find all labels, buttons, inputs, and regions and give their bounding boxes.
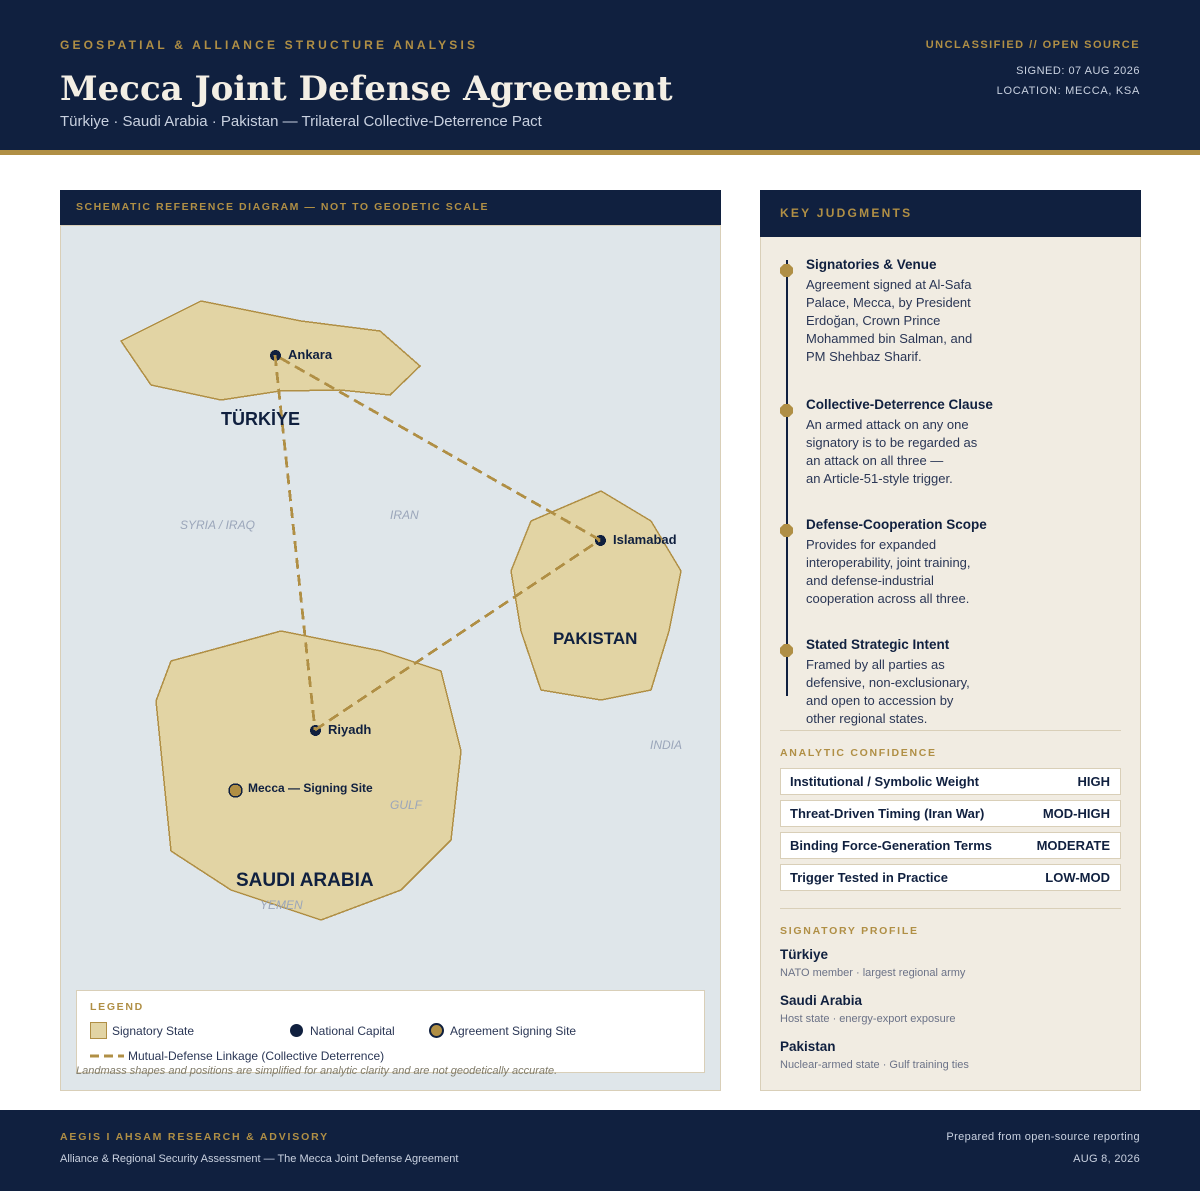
location: LOCATION: MECCA, KSA [997,85,1140,97]
confidence heading: ANALYTIC CONFIDENCE [780,747,937,759]
region: Pakistan [511,491,681,700]
confidence row 3: MODERATE [1037,838,1110,853]
capital marker: Ankara [270,350,281,361]
judgment: signatories [780,257,972,364]
judgment: cooperation scope: and defense-industrial [806,573,934,588]
context labels: GULF [390,798,423,812]
confidence row 2: MOD-HIGH [1043,806,1110,821]
capital marker: Riyadh [310,725,321,736]
judgment: strategic intent [780,637,970,726]
signatory profile [780,925,969,1071]
key judgments heading: KEY JUDGMENTS [780,206,912,220]
judgment: cooperation scope: interoperability, joint training, [806,555,971,570]
footer organisation: AEGIS I AHSAM RESEARCH & ADVISORY [60,1131,329,1143]
confidence row 4: Trigger Tested in Practice [790,870,948,885]
judgment: deterrence clause: an attack on all three — [806,453,943,468]
signing site marker: Mecca [229,784,242,797]
confidence row 1: HIGH [1078,774,1110,789]
legend item: signatory state [90,1022,194,1039]
confidence row 1 [780,768,1121,795]
judgment: cooperation scope: cooperation across all three. [806,591,969,606]
confidence row 3: Binding Force-Generation Terms [790,838,992,853]
profile: Pakistan: Pakistan [780,1039,836,1054]
panel: schematic map [60,225,721,1091]
gold header rule [0,150,1200,155]
legend item: signatory state: Signatory State [112,1024,194,1038]
city labels: Mecca — Signing Site [248,781,373,795]
profile: Türkiye: NATO member · largest regional army [780,967,965,979]
judgment: signatories: PM Shehbaz Sharif. [806,349,922,364]
legend item: signing site: Agreement Signing Site [450,1024,576,1038]
profile: Türkiye [780,947,966,979]
header band [0,0,1200,155]
profile: Saudi Arabia: Host state · energy-export exposure [780,1013,955,1025]
confidence row 1: Institutional / Symbolic Weight [790,774,979,789]
classification: UNCLASSIFIED // OPEN SOURCE [926,39,1140,51]
legend [76,990,705,1073]
map header label: SCHEMATIC REFERENCE DIAGRAM — NOT TO GEODETIC SCALE [76,201,489,213]
region: Saudi Arabia [156,631,461,920]
judgment: strategic intent: Framed by all parties as [806,657,945,672]
judgment: cooperation scope [780,517,987,606]
judgment: signatories: Signatories & Venue [806,257,937,272]
judgment: strategic intent: other regional states. [806,711,927,726]
context labels: IRAN [390,508,419,522]
confidence row 3 [780,832,1121,859]
header eyebrow: GEOSPATIAL & ALLIANCE STRUCTURE ANALYSIS [60,38,478,52]
footer band [0,1110,1200,1191]
context labels: YEMEN [260,898,303,912]
judgment: strategic intent: defensive, non-exclusionary, [806,675,970,690]
linkage lines [275,355,600,730]
profile: Saudi Arabia: Saudi Arabia [780,993,862,1008]
capital marker: Islamabad [595,535,606,546]
judgment: cooperation scope: Defense-Cooperation Scope [806,517,987,532]
legend item: linkage: Mutual-Defense Linkage (Collective Deterrence) [128,1049,384,1063]
city labels: Ankara [288,347,333,362]
profile heading: SIGNATORY PROFILE [780,925,919,937]
judgment: deterrence clause: an Article-51-style trigger. [806,471,953,486]
footer description: Alliance & Regional Security Assessment — The Mecca Joint Defense Agreement [60,1153,458,1165]
judgment: signatories: Mohammed bin Salman, and [806,331,972,346]
region: Türkiye [121,301,420,400]
title: Mecca Joint Defense Agreement [60,69,673,109]
judgment: strategic intent: Stated Strategic Intent [806,637,949,652]
judgment: deterrence clause: Collective-Deterrence Clause [806,397,993,412]
timeline spine [786,260,788,696]
judgment: signatories: Agreement signed at Al-Safa [806,277,972,292]
confidence row 4 [780,864,1121,891]
profile: Pakistan: Nuclear-armed state · Gulf training ties [780,1059,969,1071]
context labels: SYRIA / IRAQ [180,518,255,532]
profile: Türkiye: Türkiye [780,947,828,962]
signed date: SIGNED: 07 AUG 2026 [1016,65,1140,77]
legend item: national capital: National Capital [310,1024,395,1038]
judgment: signatories: Palace, Mecca, by President [806,295,971,310]
classification block [926,39,1140,97]
confidence row 2: Threat-Driven Timing (Iran War) [790,806,984,821]
state labels [221,409,637,891]
state labels: TÜRKİYE [221,409,300,429]
judgment: cooperation scope: Provides for expanded [806,537,936,552]
judgment: deterrence clause: signatory is to be regarded as [806,435,977,450]
context labels: INDIA [650,738,682,752]
profile: Saudi Arabia [780,993,955,1025]
state labels: PAKISTAN [553,629,637,648]
city labels: Islamabad [613,532,677,547]
panel: key judgments body [760,237,1141,1091]
profile: Pakistan [780,1039,969,1071]
judgment: signatories: Erdoğan, Crown Prince [806,313,940,328]
map footnote: Landmass shapes and positions are simplified for analytic clarity and are not geodetically accurate. [76,1065,557,1077]
confidence row 4: LOW-MOD [1045,870,1110,885]
footer date: AUG 8, 2026 [1073,1153,1140,1165]
city labels: Riyadh [328,722,371,737]
judgment: deterrence clause [780,397,993,486]
context labels [180,508,682,912]
subtitle: Türkiye · Saudi Arabia · Pakistan — Trilateral Collective-Deterrence Pact [60,113,542,130]
confidence row 2 [780,800,1121,827]
panel: key judgments header [760,190,1141,237]
legend title: LEGEND [90,1001,144,1013]
panel: map header [60,190,721,225]
city labels [248,347,677,795]
state labels: SAUDI ARABIA [236,870,374,891]
judgment: strategic intent: and open to accession by [806,693,953,708]
footer source: Prepared from open-source reporting [946,1131,1140,1143]
judgment: deterrence clause: An armed attack on any one [806,417,969,432]
analytic confidence [780,747,1121,891]
